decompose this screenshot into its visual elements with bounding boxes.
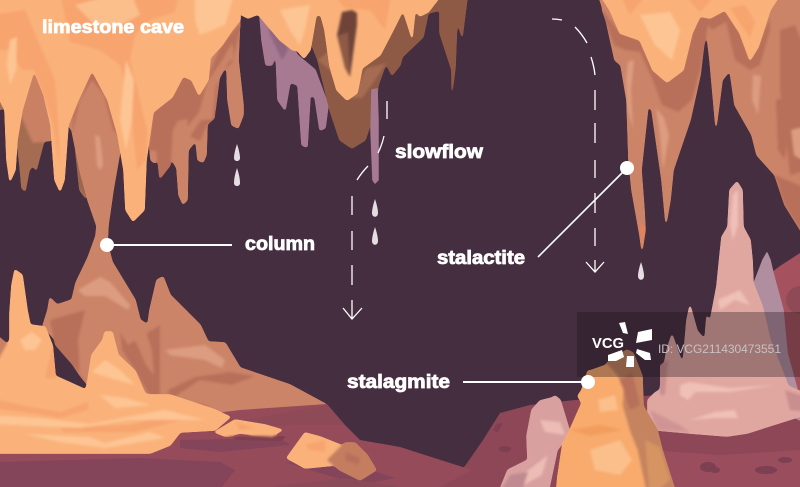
orange mound of stalagmites <box>0 270 230 453</box>
purple back stalagmite <box>753 253 800 420</box>
callout: stalactite: stalactite <box>437 248 525 269</box>
dashed arrow: stalactite drop <box>552 19 604 272</box>
left ceiling stalactites <box>0 12 243 204</box>
column <box>43 70 327 425</box>
center ceiling brown back <box>300 0 468 148</box>
central stalagmite <box>556 350 677 487</box>
callout: stalagmite <box>347 372 595 393</box>
callout: column <box>100 234 315 255</box>
label: limestone cave: limestone cave <box>42 16 184 37</box>
pink small stalagmite <box>497 396 570 487</box>
rock pair <box>287 433 376 480</box>
label: slowflow: slowflow <box>395 141 484 163</box>
callout: stalagmite: stalagmite <box>347 372 450 393</box>
callout: column: column <box>245 234 315 255</box>
left ceiling orange mass <box>0 0 240 221</box>
center ceiling orange <box>240 0 445 100</box>
small rock <box>215 420 288 441</box>
right ceiling stalactites <box>597 0 800 250</box>
dashed arrow: slow flow <box>343 101 387 319</box>
watermark <box>577 312 800 377</box>
left floor <box>0 404 472 487</box>
pink big stalagmite <box>648 182 800 436</box>
watermark: ID: VCG211430473551 <box>658 342 781 356</box>
long purple stalactite <box>371 89 378 183</box>
water drops <box>234 144 644 280</box>
right ceiling orange <box>597 0 783 82</box>
right floor and back wall <box>400 253 800 487</box>
watermark: VCG <box>592 335 624 352</box>
purple back stalactites <box>260 15 328 147</box>
callout: stalactite <box>437 161 634 269</box>
